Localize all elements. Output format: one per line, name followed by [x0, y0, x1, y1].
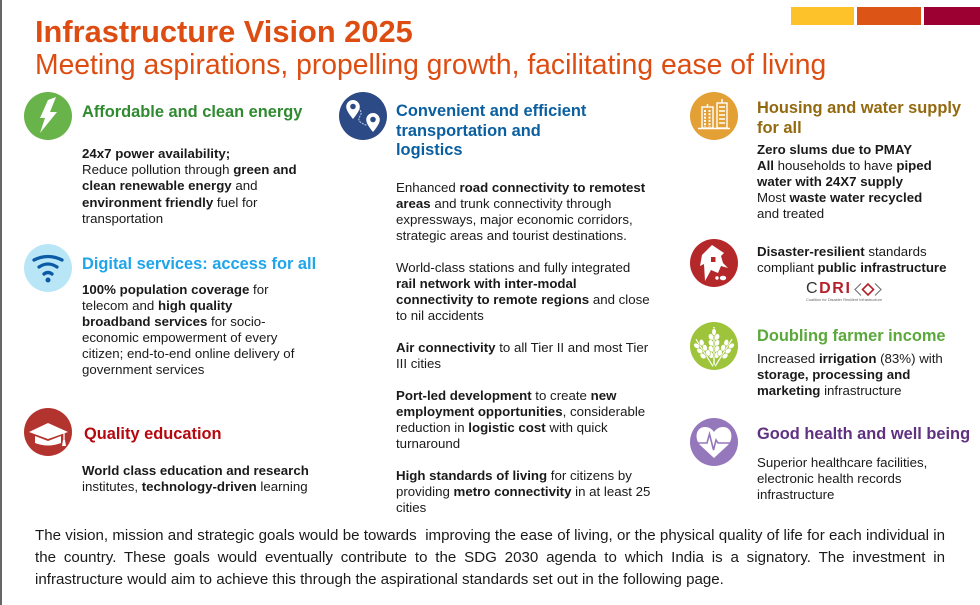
- text: digital: broadband services for socio-: [82, 314, 266, 329]
- logo: CDRI: CDRI: [806, 280, 852, 297]
- text: digital: telecom and high quality: [82, 298, 232, 313]
- text: transportation: Air connectivity to all Tier II and most Tier: [396, 340, 648, 354]
- footer paragraph: the country. These goals would eventually contribute to the SDG 2030 agenda to which India is a signatory. The investment in: [35, 549, 945, 566]
- text: housing: Zero slums due to PMAY: [757, 142, 912, 157]
- heading: housing: [757, 99, 961, 136]
- heading: farmer income: Doubling farmer income: [757, 327, 946, 345]
- text: transportation: expressways, major economic corridors,: [396, 212, 633, 226]
- text: transportation: Port-led development to create new: [396, 388, 616, 402]
- text: energy: 24x7 power availability;: [82, 146, 230, 161]
- icon: graduation cap: [24, 408, 72, 456]
- text: health: electronic health records: [757, 471, 902, 486]
- footer paragraph: [35, 527, 945, 588]
- text: digital: citizen; end-to-end online delivery of: [82, 346, 294, 361]
- footer paragraph: infrastructure would aim to achieve this through the aspirational standards set out in the following page.: [35, 571, 724, 588]
- text: digital: economic empowerment of every: [82, 330, 277, 345]
- heading: housing: Housing and water supply: [757, 99, 961, 117]
- text: health: infrastructure: [757, 487, 834, 502]
- text: energy: transportation: [82, 211, 163, 226]
- text: farmer income: marketing infrastructure: [757, 383, 902, 398]
- text: energy: environment friendly fuel for: [82, 195, 257, 210]
- text: energy: Reduce pollution through green and: [82, 162, 297, 177]
- icon: map pins: [339, 92, 387, 140]
- text: transportation: areas and trunk connectivity through: [396, 196, 611, 210]
- text: education: [82, 463, 309, 494]
- logo: CDRI: Coalition for Disaster Resilient Infrastructure: [806, 297, 882, 302]
- icon: disaster house: [690, 239, 738, 287]
- text: housing: water with 24X7 supply: [757, 174, 903, 189]
- text: disaster: Disaster-resilient standards: [757, 244, 927, 259]
- text: farmer income: Increased irrigation (83%) with: [757, 351, 943, 366]
- text: health: Superior healthcare facilities,: [757, 455, 927, 470]
- icon: wifi: [24, 244, 72, 292]
- text: transportation: III cities: [396, 356, 441, 370]
- text: farmer income: storage, processing and: [757, 367, 910, 382]
- text: farmer income: [757, 351, 943, 398]
- text: digital: 100% population coverage for: [82, 282, 269, 297]
- footer paragraph: The vision, mission and strategic goals would be towards improving the ease of living, or the physical quality of life for each individual in: [35, 527, 945, 544]
- text: housing: [757, 142, 932, 221]
- text: transportation: connectivity to remote regions and close: [396, 292, 650, 306]
- heading: energy: Affordable and clean energy: [82, 103, 302, 121]
- text: education: institutes, technology-driven learning: [82, 479, 308, 494]
- heading: transportation: transportation and: [396, 122, 541, 140]
- heading: transportation: Convenient and efficient: [396, 102, 586, 120]
- text: energy: [82, 146, 297, 226]
- text: transportation: High standards of living for citizens by: [396, 468, 632, 482]
- text: transportation: rail network with inter-modal: [396, 276, 577, 290]
- heading: education: Quality education: [84, 425, 222, 443]
- text: transportation: [396, 180, 650, 514]
- text: housing: Most waste water recycled: [757, 190, 922, 205]
- text: transportation: providing metro connectivity in at least 25: [396, 484, 650, 498]
- icon: wheat: [690, 322, 738, 370]
- text: energy: clean renewable energy and: [82, 178, 258, 193]
- text: housing: All households to have piped: [757, 158, 932, 173]
- text: transportation: World-class stations and fully integrated: [396, 260, 630, 274]
- heading: digital: Digital services: access for all: [82, 255, 316, 273]
- subtitle: Meeting aspirations, propelling growth, facilitating ease of living: [35, 48, 826, 80]
- text: transportation: turnaround: [396, 436, 460, 450]
- icon: heart pulse: [690, 418, 738, 466]
- heading: health: Good health and well being: [757, 425, 970, 443]
- accent colour bars: [791, 7, 980, 25]
- text: transportation: strategic areas and tourist destinations.: [396, 228, 627, 242]
- text: health: [757, 455, 927, 502]
- heading: housing: for all: [757, 118, 802, 136]
- text: digital: government services: [82, 362, 204, 377]
- heading: transportation: [396, 102, 586, 159]
- text: disaster: compliant public infrastructure: [757, 260, 946, 275]
- text: disaster: [757, 244, 946, 275]
- heading: transportation: logistics: [396, 141, 462, 159]
- icon: buildings: [690, 92, 738, 140]
- text: housing: and treated: [757, 206, 824, 221]
- text: transportation: reduction in logistic cost with quick: [396, 420, 608, 434]
- text: transportation: Enhanced road connectivity to remotest: [396, 180, 645, 194]
- text: education: World class education and research: [82, 463, 309, 478]
- text: transportation: cities: [396, 500, 426, 514]
- text: transportation: to nil accidents: [396, 308, 484, 322]
- logo: CDRI: [806, 280, 882, 302]
- title: Infrastructure Vision 2025: [35, 14, 413, 49]
- text: digital: [82, 282, 294, 377]
- icon: energy bolt: [24, 92, 72, 140]
- text: transportation: employment opportunities, considerable: [396, 404, 645, 418]
